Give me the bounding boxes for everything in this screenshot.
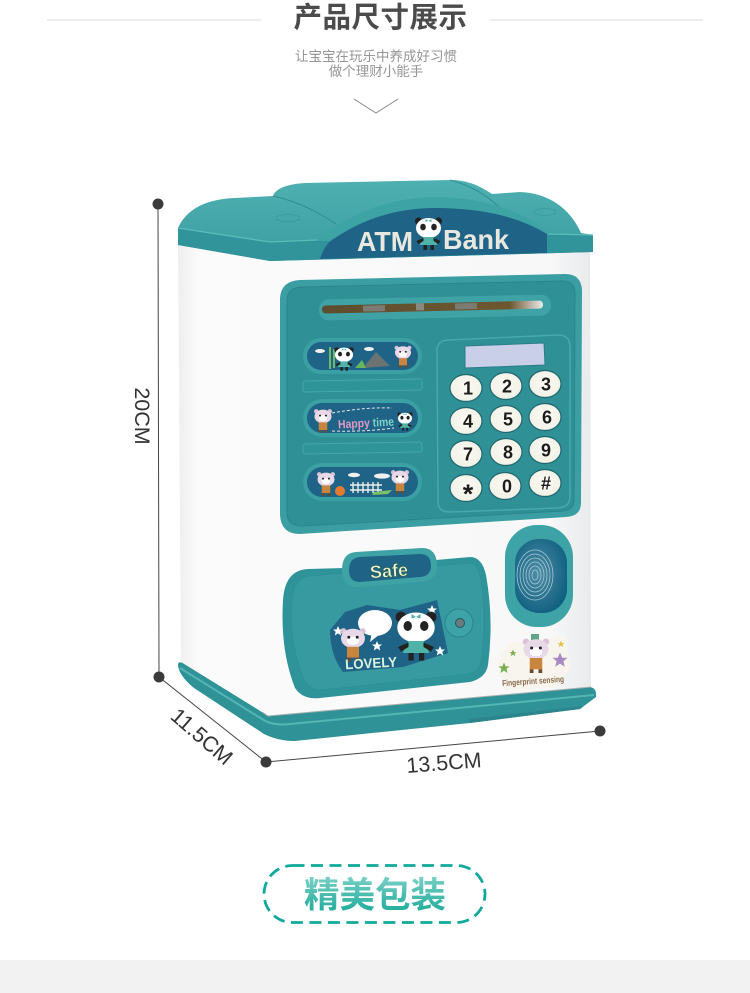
lovely sticker <box>330 600 448 672</box>
fingerprint sticker <box>497 634 570 690</box>
keypad digits <box>463 374 552 509</box>
keypad digits: 5 <box>503 410 513 430</box>
badge text: 精美包装 <box>304 875 446 915</box>
divider bar 2 <box>303 442 422 454</box>
keypad digits: * <box>463 479 474 509</box>
body bottom seam <box>262 687 591 716</box>
keypad digits: 4 <box>463 412 473 432</box>
sticker pill 2 <box>303 399 422 437</box>
safe text: Safe <box>369 560 409 582</box>
dimension lines <box>152 198 606 768</box>
label: depth 11.5CM: 11.5CM <box>166 703 237 770</box>
lcd screen <box>465 343 545 368</box>
fingerprint sticker caption: Fingerprint sensing <box>502 674 564 688</box>
body shell <box>178 245 591 716</box>
safe door <box>282 548 491 698</box>
keypad digits: 8 <box>503 442 513 462</box>
coin slot <box>319 294 551 321</box>
sticker pill 2: Happy time <box>338 415 395 431</box>
upper control panel <box>280 274 582 534</box>
icon: down chevron <box>354 99 398 113</box>
sticker pill 3 <box>303 463 422 501</box>
roof lip arch <box>316 197 549 241</box>
header rule right <box>490 19 703 21</box>
label: width 13.5CM: 13.5CM <box>405 748 482 778</box>
label: height 20CM: 20CM <box>130 387 154 445</box>
keypad digits: 1 <box>463 378 473 398</box>
key lock <box>445 609 473 637</box>
keypad digits: 6 <box>542 408 552 428</box>
section badge: 精美包装 <box>264 866 485 922</box>
title: 产品尺寸展示 <box>293 2 468 34</box>
subtitle <box>295 48 457 79</box>
banner text: ATM: ATM <box>357 226 413 257</box>
divider bar 1 <box>303 379 422 392</box>
keypad digits: 9 <box>541 440 551 460</box>
fingerprint reader <box>505 525 573 627</box>
footer band <box>0 960 750 993</box>
subtitle: 做个理财小能手 <box>329 64 423 79</box>
keypad digits: # <box>541 474 551 494</box>
keypad digits: 3 <box>541 374 551 394</box>
banner panda <box>415 217 442 250</box>
subtitle: 让宝宝在玩乐中养成好习惯 <box>295 48 457 64</box>
safe label tab <box>342 548 437 587</box>
keypad <box>437 335 570 512</box>
keypad digits: 7 <box>463 444 473 464</box>
banner text: Bank: Bank <box>443 224 510 255</box>
product: ATM piggy bank <box>178 180 596 741</box>
base <box>178 662 596 741</box>
header rule left <box>47 19 261 21</box>
keypad buttons <box>450 370 561 502</box>
roof banner <box>320 208 547 259</box>
keypad digits: 2 <box>502 376 512 396</box>
lovely text: LOVELY <box>345 654 398 672</box>
sticker pill 1 <box>303 338 422 374</box>
keypad digits: 0 <box>502 476 512 496</box>
roof cap <box>178 180 593 261</box>
